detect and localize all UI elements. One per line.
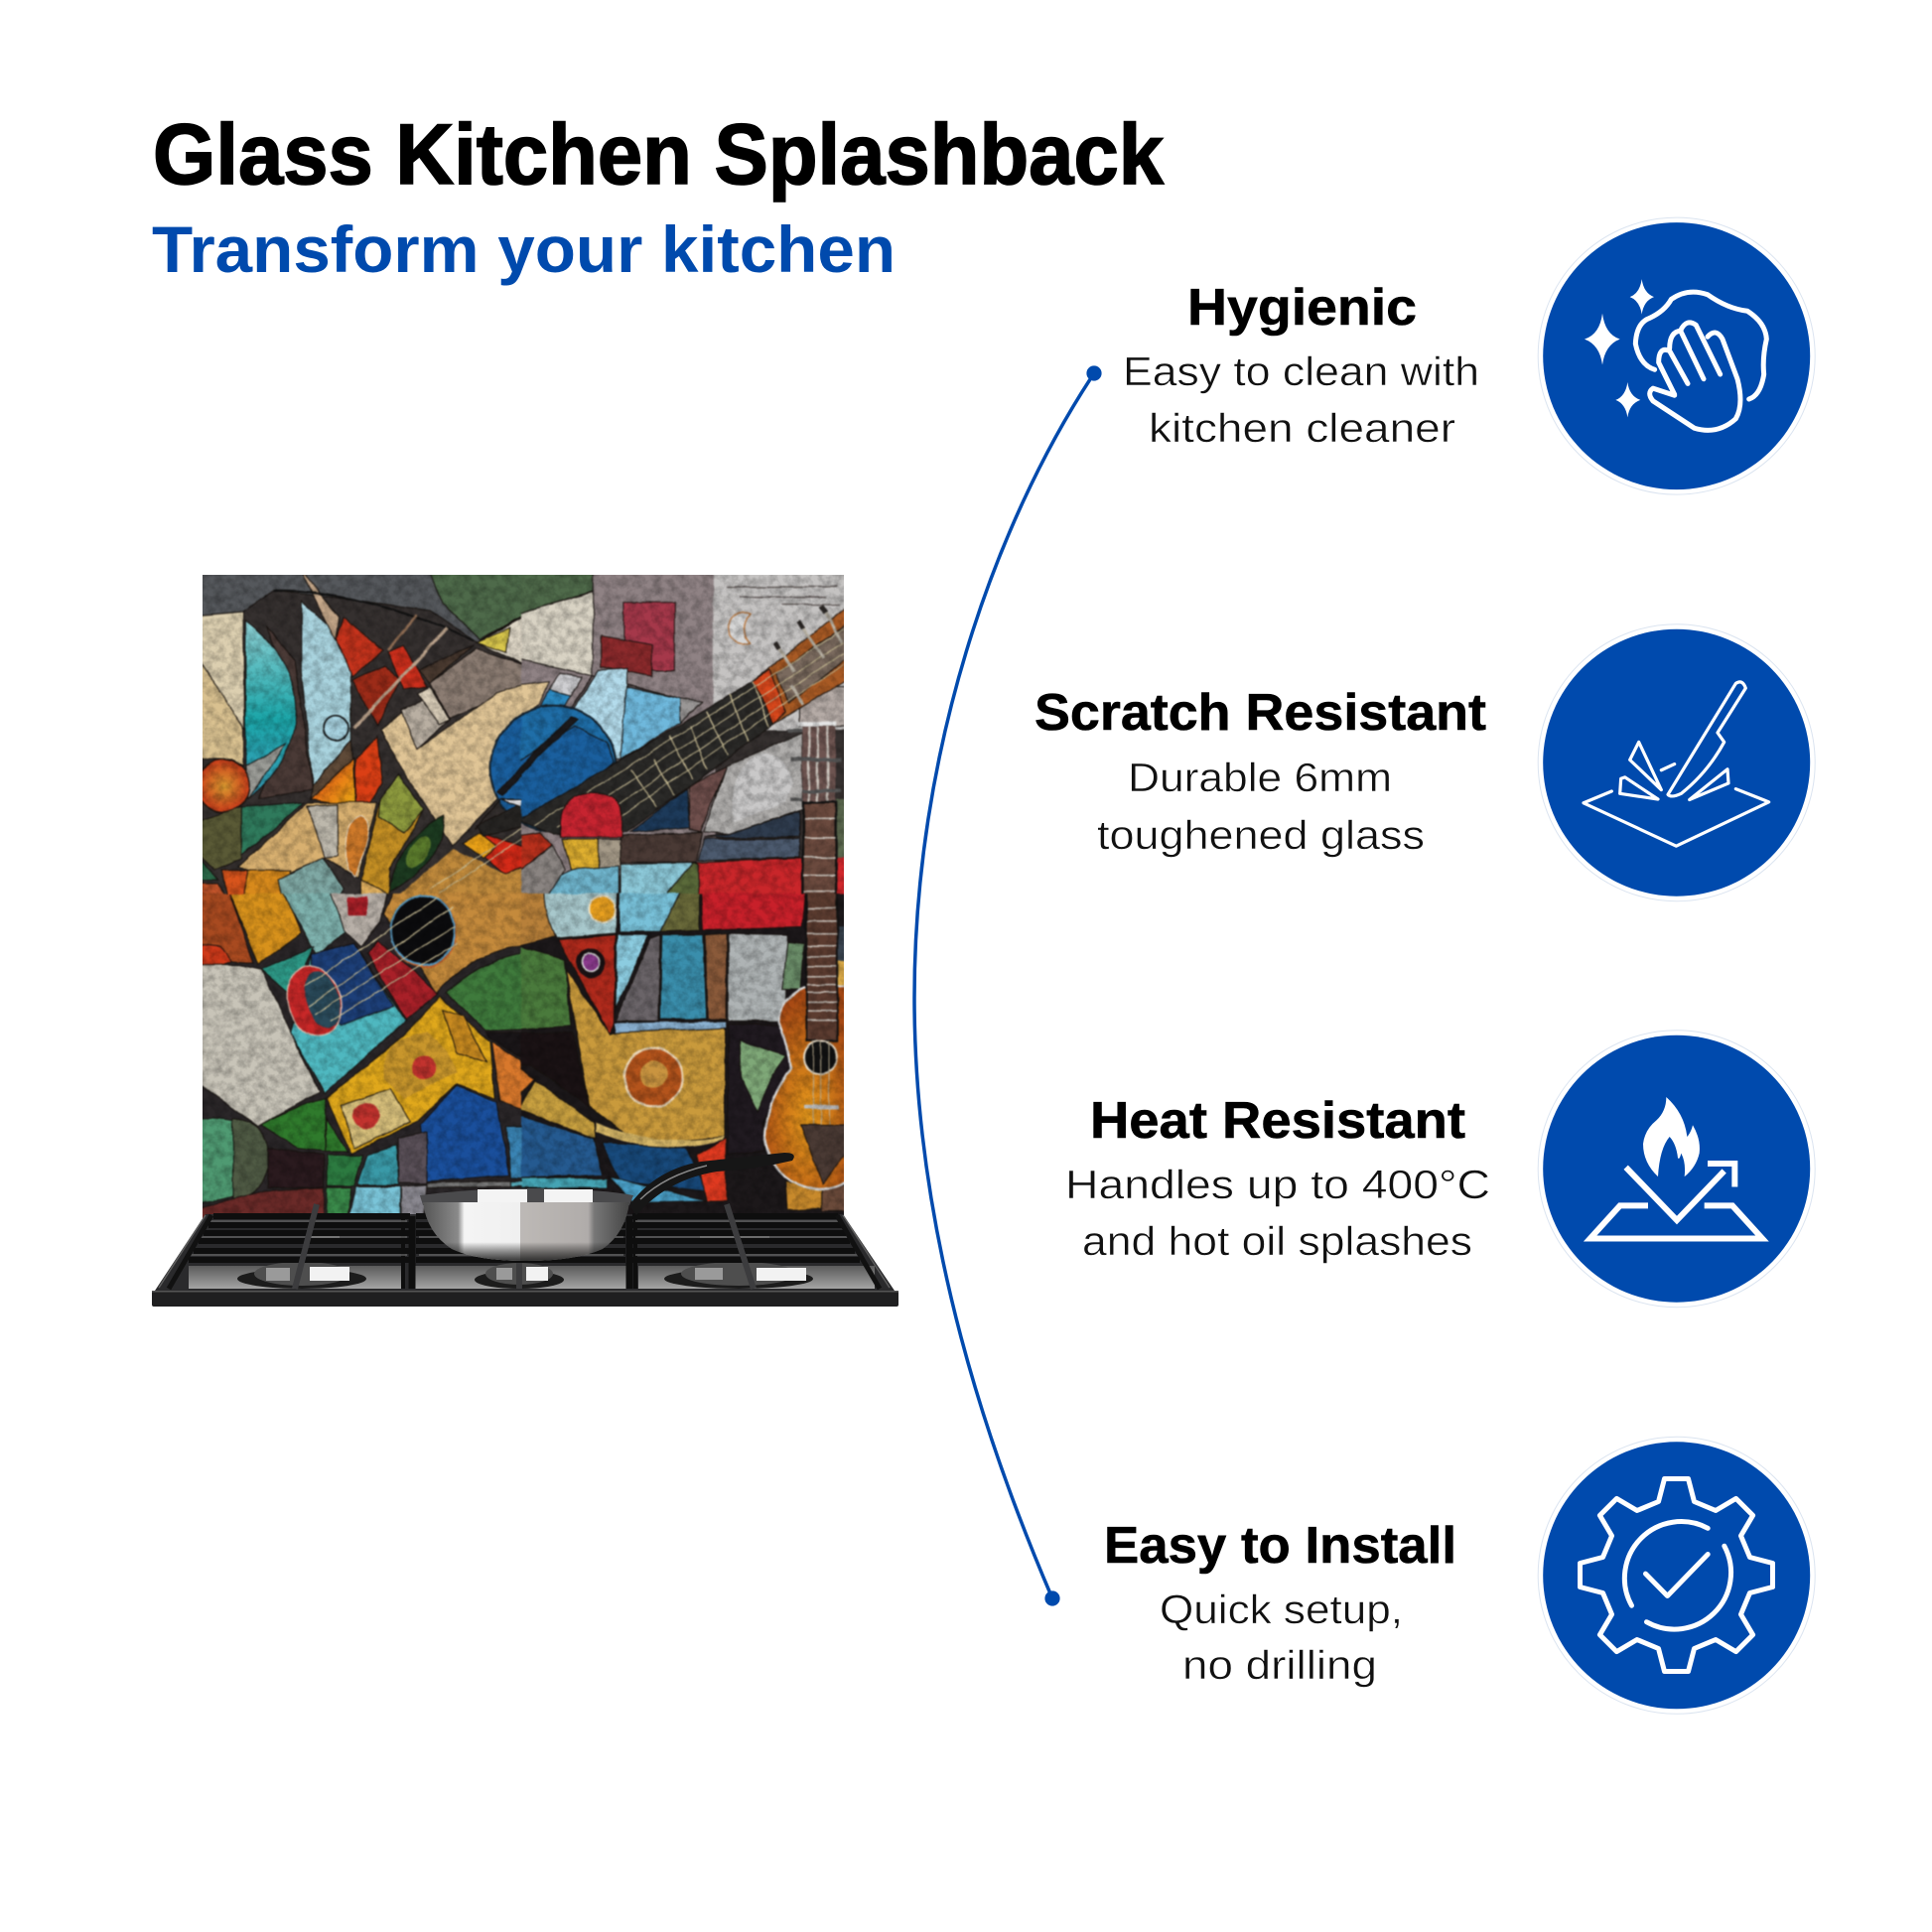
feature: Hygienic text: Hygienic [1187, 279, 1417, 337]
icon: hand wiping with sparkles [1538, 217, 1815, 494]
feature: Hygienic text: Easy to clean with [1123, 348, 1479, 394]
feature: Scratch Resistant text: Durable 6mm [1128, 755, 1392, 800]
frying pan with handle [420, 1153, 794, 1261]
feature: Scratch Resistant text: Scratch Resistant [1035, 684, 1486, 742]
feature: Heat Resistant text: Handles up to 400°C [1065, 1162, 1490, 1207]
feature: Hygienic text [1123, 279, 1479, 451]
feature: Easy to Install text: no drilling [1182, 1642, 1377, 1688]
artwork: lower right quadrant [519, 892, 844, 1215]
grate bars [189, 1216, 860, 1289]
feature: Easy to Install text [1104, 1517, 1456, 1688]
feature: Heat Resistant text: and hot oil splashes [1082, 1218, 1472, 1264]
small ukulele body [764, 986, 852, 1189]
subtitle: Transform your kitchen [152, 212, 896, 286]
small ukulele neck [806, 891, 837, 1040]
title: Glass Kitchen Splashback [153, 107, 1164, 203]
feature: Heat Resistant text: Heat Resistant [1090, 1092, 1465, 1150]
feature: Heat Resistant text [1065, 1092, 1490, 1264]
icon: knife scratching glass [1538, 624, 1815, 901]
icon: gear with check mark [1538, 1437, 1815, 1714]
feature: Scratch Resistant text [1035, 684, 1486, 858]
feature: Easy to Install text: Quick setup, [1160, 1587, 1403, 1632]
artwork: upper right quadrant [519, 575, 844, 896]
panel: abstract guitar splashback artwork [203, 575, 844, 1219]
connector curve with end dots [914, 365, 1102, 1606]
icon: flame deflected by glass [1538, 1031, 1815, 1308]
feature: Easy to Install text: Easy to Install [1104, 1517, 1456, 1575]
stove: gas hob with burners and grates [152, 1204, 898, 1307]
blue circle, left part [488, 713, 524, 811]
artwork: upper left quadrant [203, 575, 524, 896]
feature: Scratch Resistant text: toughened glass [1097, 812, 1425, 858]
feature: Hygienic text: kitchen cleaner [1149, 405, 1455, 451]
burners [237, 1233, 813, 1289]
artwork: lower left quadrant [203, 892, 523, 1218]
